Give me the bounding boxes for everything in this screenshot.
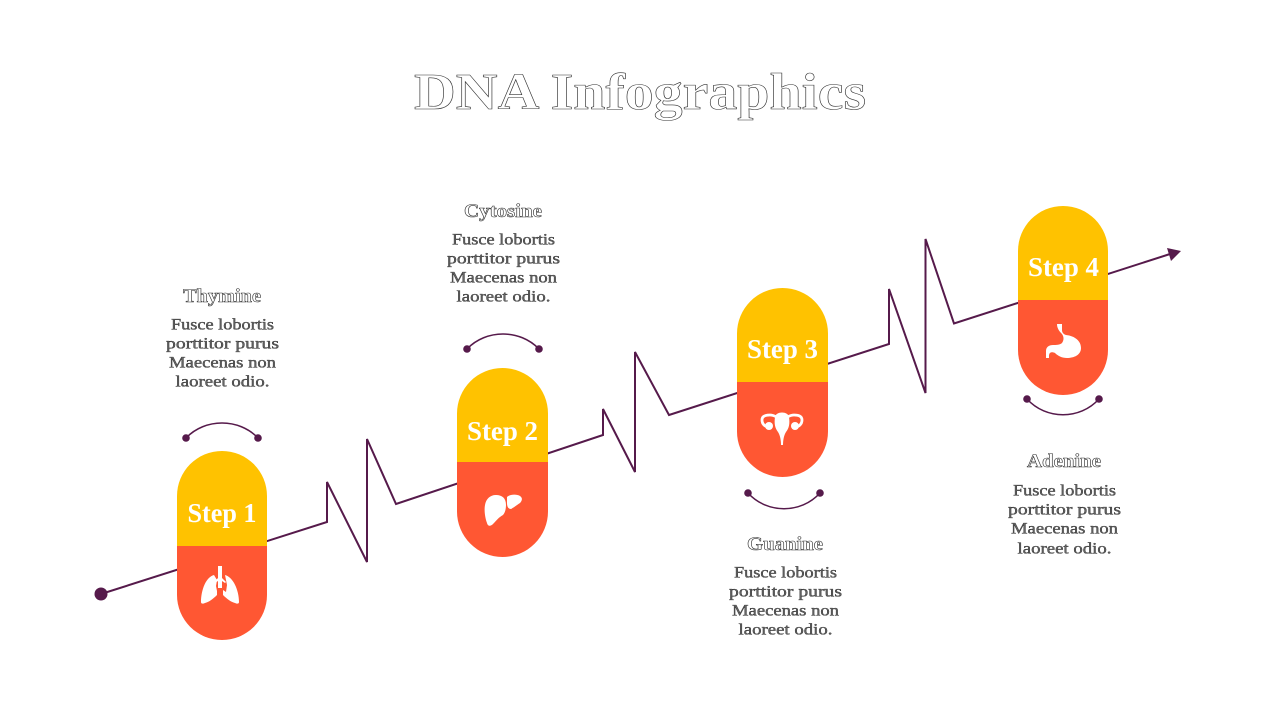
text: Thymine: porttitor purus xyxy=(166,336,279,352)
text: Thymine: laoreet odio. xyxy=(176,374,270,390)
pill: step 4 xyxy=(1018,206,1108,395)
arc: step 4 xyxy=(1023,395,1103,415)
icon: stomach xyxy=(1046,324,1081,358)
icon: lungs xyxy=(201,566,239,604)
text: Guanine: porttitor purus xyxy=(729,584,842,600)
text: Guanine: Fusce lobortis xyxy=(734,564,837,582)
text: Thymine: Thymine xyxy=(183,286,261,307)
text: Adenine: laoreet odio. xyxy=(1018,540,1112,558)
text: Guanine xyxy=(729,534,842,638)
text: Adenine: Fusce lobortis xyxy=(1013,482,1116,500)
arc: step 2 xyxy=(463,334,543,353)
icon: liver xyxy=(485,495,522,526)
text: Guanine: Guanine xyxy=(747,534,823,555)
pill: step 4: Step 4 xyxy=(1028,252,1099,282)
pill: step 3: Step 3 xyxy=(747,334,818,364)
step 3 group xyxy=(729,288,842,638)
arc: step 3 xyxy=(744,489,824,509)
arc: step 1 xyxy=(182,423,262,442)
text: Cytosine: Maecenas non xyxy=(450,270,557,286)
text: Guanine: Maecenas non xyxy=(732,602,839,620)
pill: step 1 xyxy=(177,451,267,640)
text: Cytosine: laoreet odio. xyxy=(456,288,550,306)
title: DNA Infographics xyxy=(414,64,866,121)
text: Adenine: Maecenas non xyxy=(1011,520,1118,538)
text: Thymine: Fusce lobortis xyxy=(171,316,274,334)
step 4 group xyxy=(1008,206,1121,558)
pill: step 3 xyxy=(737,288,828,477)
step 1 group xyxy=(166,286,279,640)
step 2 group xyxy=(447,201,560,557)
text: Guanine: laoreet odio. xyxy=(738,622,832,638)
zigzag arrow line xyxy=(94,239,1181,600)
icon: uterus xyxy=(762,412,802,445)
pill: step 1: Step 1 xyxy=(188,498,256,528)
text: Adenine: Adenine xyxy=(1027,451,1101,472)
text: Adenine: porttitor purus xyxy=(1008,502,1121,518)
pill: step 2: Step 2 xyxy=(467,416,538,446)
text: Adenine xyxy=(1008,451,1121,558)
pill: step 2 xyxy=(457,368,548,557)
text: Thymine: Maecenas non xyxy=(169,354,276,372)
text: Cytosine: Fusce lobortis xyxy=(452,232,555,248)
text: Cytosine: Cytosine xyxy=(464,201,542,222)
text: Cytosine: porttitor purus xyxy=(447,250,560,268)
text: Thymine xyxy=(166,286,279,390)
text: Cytosine xyxy=(447,201,560,306)
